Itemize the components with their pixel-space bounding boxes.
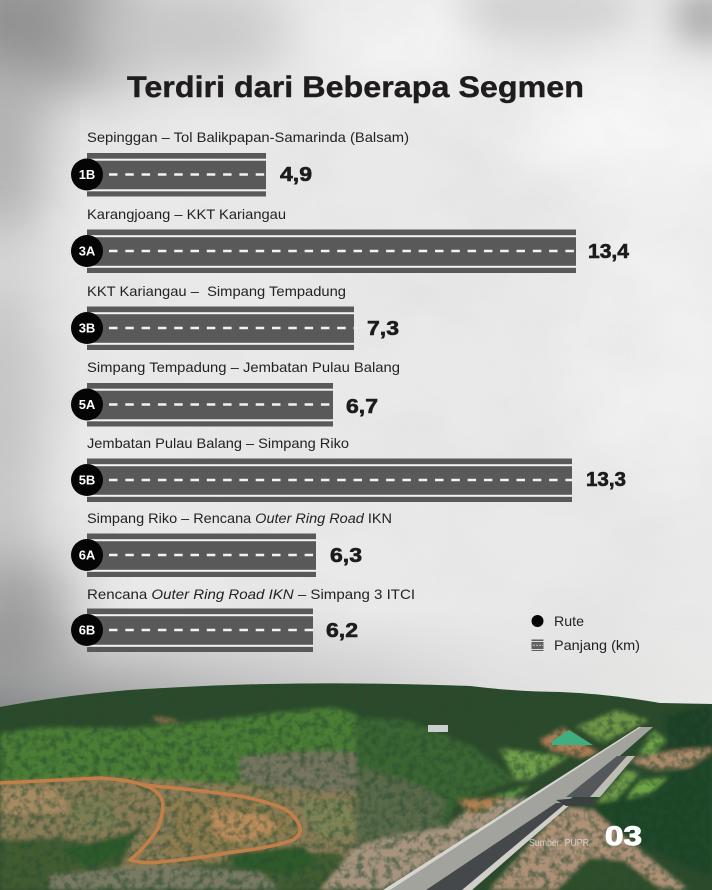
route badge 6B: 6B xyxy=(79,622,95,638)
legend xyxy=(532,613,640,653)
value 6A: 6,3 xyxy=(330,545,362,567)
route badge 1B xyxy=(71,158,103,190)
value 3B: 7,3 xyxy=(367,318,399,340)
segment 6B xyxy=(71,586,415,652)
dead trees xyxy=(240,752,356,793)
value 5A: 6,7 xyxy=(346,396,378,418)
legend: rute: Rute xyxy=(554,613,584,629)
route badge 5A xyxy=(71,388,103,420)
segment 3A xyxy=(71,206,630,273)
road bar 5B xyxy=(87,458,572,502)
page number: 03 xyxy=(605,821,642,851)
segment 3B xyxy=(71,283,399,350)
value 5B: 13,3 xyxy=(586,469,626,491)
route badge 5B xyxy=(71,464,103,496)
label 1B: Sepinggan – Tol Balikpapan-Samarinda (Balsam) xyxy=(87,129,409,145)
right forest xyxy=(593,757,712,877)
light-green field xyxy=(499,748,569,780)
right-side dirt xyxy=(623,748,712,770)
leaf texture xyxy=(0,680,712,890)
route badge 6A: 6A xyxy=(79,548,96,562)
value 3A: 13,4 xyxy=(588,241,630,263)
label 3B: KKT Kariangau – Simpang Tempadung xyxy=(87,283,346,299)
right-side light fields xyxy=(596,770,640,803)
route badge 3B xyxy=(71,312,103,344)
road bar 3A xyxy=(87,230,576,273)
road bar 3B xyxy=(87,306,354,350)
route badge 6A xyxy=(71,539,103,571)
label 5A: Simpang Tempadung – Jembatan Pulau Balang xyxy=(87,359,400,375)
label 3A: Karangjoang – KKT Kariangau xyxy=(87,206,286,222)
segment 6A xyxy=(71,510,392,577)
segment 5B xyxy=(71,435,626,502)
label 6A: Simpang Riko – Rencana Outer Ring Road IKN xyxy=(87,510,392,526)
segment 1B xyxy=(71,129,409,196)
label 6B: Rencana Outer Ring Road IKN – Simpang 3 ITCI xyxy=(87,586,415,602)
bottom scrub xyxy=(0,838,356,890)
bottom-right forest xyxy=(556,857,663,890)
route badge 3A xyxy=(71,235,103,267)
road bar 1B xyxy=(87,153,266,196)
centre dark-green hill xyxy=(354,716,516,830)
green slope behind road xyxy=(576,710,649,743)
aerial photo: hills and toll road xyxy=(0,680,712,890)
lower-left cleared land xyxy=(0,774,359,870)
label 5B: Jembatan Pulau Balang – Simpang Riko xyxy=(87,435,349,451)
road-side dirt patch xyxy=(458,797,505,815)
cloudy sky background xyxy=(0,0,712,707)
left light-green hill xyxy=(0,707,356,793)
route badge 1B: 1B xyxy=(79,167,95,182)
dirt track xyxy=(0,778,300,863)
far field xyxy=(639,730,666,755)
segment 5A xyxy=(71,359,400,426)
road bar 6A xyxy=(87,534,316,577)
dark forest backdrop xyxy=(0,680,712,890)
road bar 5A xyxy=(87,383,333,426)
route badge 5A: 5A xyxy=(79,397,96,412)
route badge 3B: 3B xyxy=(79,320,95,336)
far-right forest xyxy=(665,705,712,752)
green tarp xyxy=(552,730,593,745)
value 1B: 4,9 xyxy=(280,164,312,186)
source credit: Sumber: PUPR xyxy=(529,837,589,849)
route badge 5B: 5B xyxy=(79,472,95,488)
route badge 3A: 3A xyxy=(79,244,96,258)
route badge 6B xyxy=(71,614,103,646)
soil right of bridge xyxy=(489,806,689,890)
legend: panjang: Panjang (km) xyxy=(554,637,640,653)
road bar 6B xyxy=(87,608,313,652)
house xyxy=(428,725,448,732)
value 6B: 6,2 xyxy=(326,620,358,642)
grey-pink soil left of road xyxy=(320,797,530,890)
title: Terdiri dari Beberapa Segmen xyxy=(127,71,584,104)
toll road xyxy=(383,727,653,890)
dirt pad xyxy=(539,727,599,758)
